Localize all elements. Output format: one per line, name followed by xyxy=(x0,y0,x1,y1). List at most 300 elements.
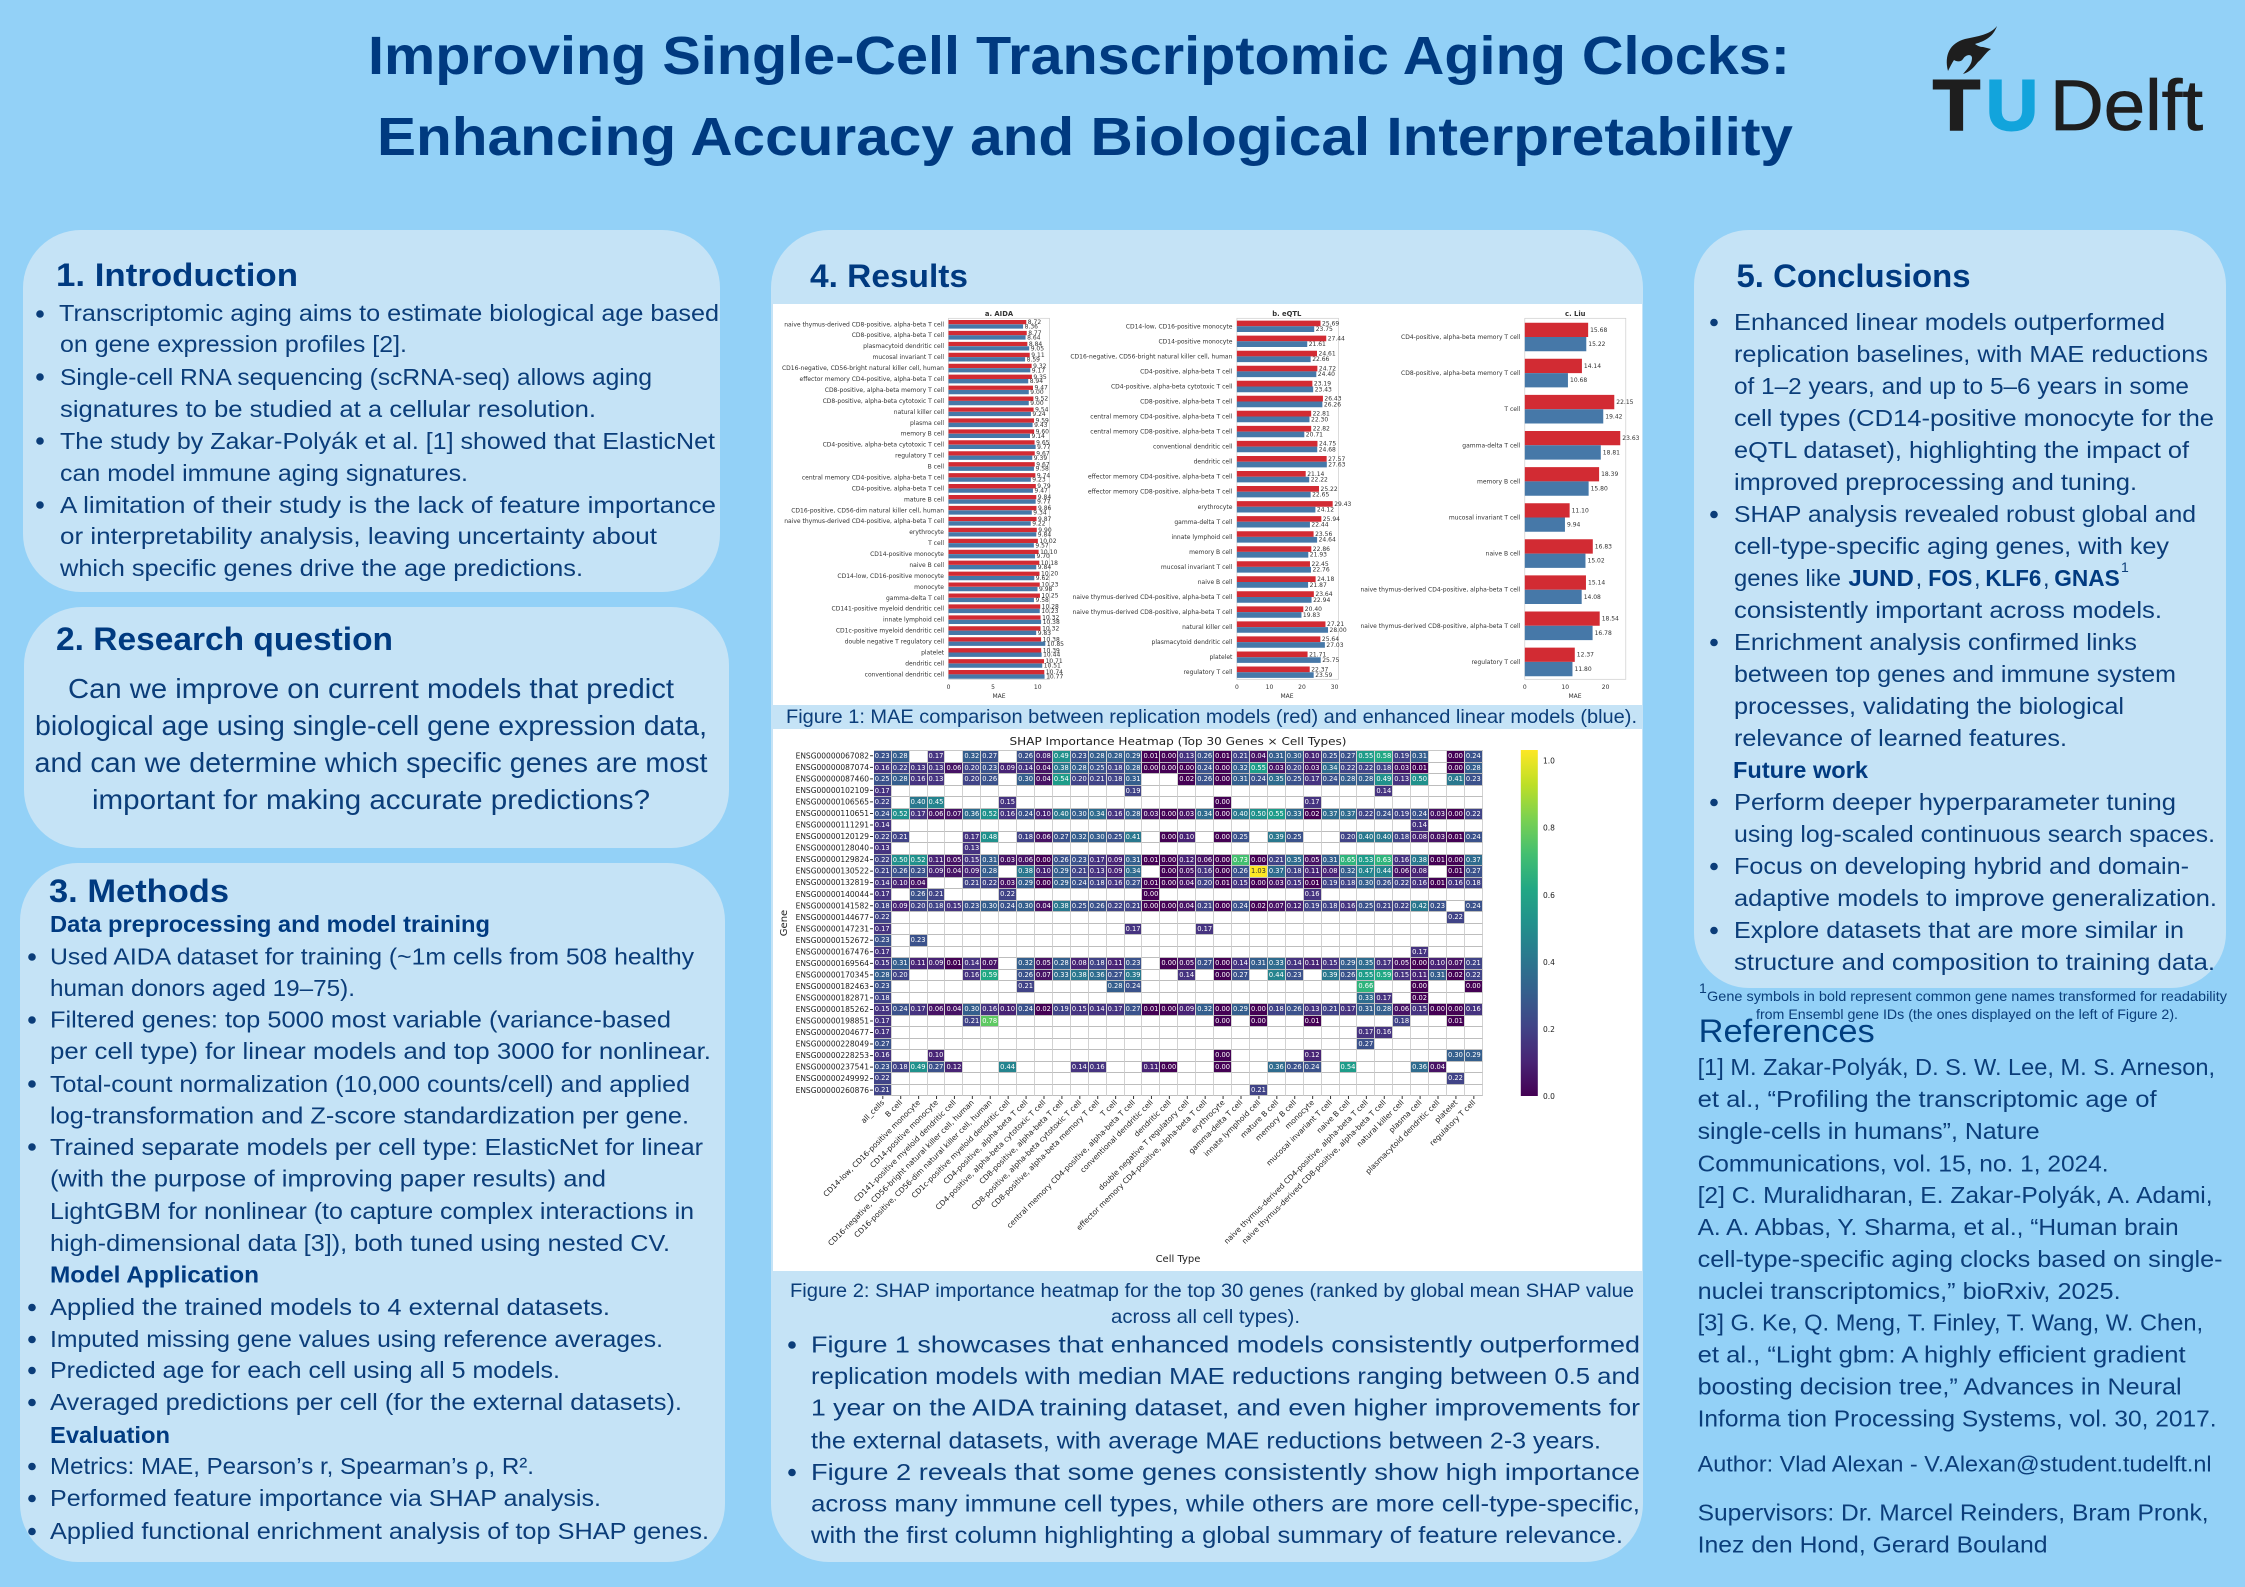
bar chart: c. Liu: 18.54 xyxy=(1602,616,1619,623)
bar chart: a. AIDA: 9.23 xyxy=(1032,477,1046,484)
chart: SHAP importance heatmap cells: 0.21 xyxy=(1126,902,1140,910)
chart: SHAP importance heatmap cells: 0.24 xyxy=(1000,902,1015,910)
bar chart: c. Liu: 22.15 xyxy=(1616,399,1634,406)
chart: SHAP importance heatmap cells: 0.32 xyxy=(964,752,979,760)
chart: SHAP importance heatmap cells: 0.17 xyxy=(911,1005,926,1013)
bar chart: a. AIDA: 8.84 xyxy=(1029,341,1042,348)
chart: SHAP importance heatmap cells: 0.22 xyxy=(1394,902,1409,910)
chart: SHAP importance heatmap cells: 0.22 xyxy=(1466,970,1481,978)
chart: SHAP importance heatmap cells: 0.04 xyxy=(1430,1062,1445,1070)
chart: SHAP importance heatmap cells: 0.03 xyxy=(1000,856,1015,864)
bar chart: a. AIDA: 9.57 xyxy=(1035,542,1049,549)
chart: SHAP importance heatmap cells: 0.16 xyxy=(1305,890,1320,898)
chart: SHAP importance heatmap cells: 0.12 xyxy=(1287,902,1302,910)
chart: SHAP importance heatmap cells: 0.38 xyxy=(1412,856,1427,864)
chart: figure 2 heatmap frame: ENSG00000067082 xyxy=(796,751,869,760)
bar chart: c. Liu: memory B cell xyxy=(1477,478,1521,485)
chart: SHAP importance heatmap cells: 0.31 xyxy=(1358,1005,1373,1013)
chart: SHAP importance heatmap cells: 0.22 xyxy=(1448,1074,1463,1082)
text block: conclusions bullets: KLF6 xyxy=(1985,565,2041,591)
text block: conclusions bullets: JUND xyxy=(1848,565,1914,591)
chart: figure 2 heatmap frame: central memory CD4-positive, alpha-beta T cell xyxy=(1005,1098,1137,1230)
chart: SHAP importance heatmap cells: 0.45 xyxy=(929,798,943,806)
chart: SHAP importance heatmap cells: 0.25 xyxy=(1090,764,1105,772)
bar chart: a. AIDA: 9.43 xyxy=(1034,422,1048,429)
chart: SHAP importance heatmap cells: 0.15 xyxy=(1394,970,1409,978)
bar chart: c. Liu: 10 xyxy=(1561,684,1569,691)
chart: SHAP importance heatmap cells: 0.00 xyxy=(1215,775,1230,783)
chart: SHAP importance heatmap cells: 0.01 xyxy=(1430,878,1445,886)
bar chart: b. eQTL: effector memory CD4-positive, alpha-beta T cell xyxy=(1088,474,1233,481)
text block: future work xyxy=(1710,757,2217,975)
bar chart: a. AIDA: 10.77 xyxy=(1046,674,1063,681)
chart: SHAP importance heatmap cells: 0.23 xyxy=(875,936,890,944)
chart: SHAP importance heatmap cells: 0.27 xyxy=(1126,878,1140,886)
bar chart: a. AIDA: CD8-positive, alpha-beta T cell xyxy=(852,332,944,339)
chart: SHAP importance heatmap cells: 0.27 xyxy=(982,752,997,760)
chart: SHAP importance heatmap cells: 0.28 xyxy=(893,775,908,783)
chart: SHAP importance heatmap cells: 0.09 xyxy=(1108,867,1123,875)
chart: SHAP importance heatmap cells: 0.40 xyxy=(1358,832,1373,840)
bar chart: a. AIDA: 9.22 xyxy=(1032,520,1046,527)
text block: data preprocessing: LightGBM for nonlinear (to capture complex interactions in xyxy=(50,1198,694,1224)
chart: SHAP importance heatmap cells: 0.09 xyxy=(1000,764,1015,772)
bar chart: b. eQTL: CD8-positive, alpha-beta T cell xyxy=(1140,398,1233,406)
text block: research question xyxy=(34,673,708,815)
chart: SHAP importance heatmap cells: 0.17 xyxy=(1412,948,1427,956)
chart: SHAP importance heatmap cells: 0.22 xyxy=(1394,878,1409,886)
chart: SHAP importance heatmap cells: 0.17 xyxy=(1126,924,1140,932)
bar chart: b. eQTL: 22.30 xyxy=(1311,416,1328,423)
chart: SHAP importance heatmap cells: 0.24 xyxy=(1018,1005,1033,1013)
chart: SHAP importance heatmap cells: 0.38 xyxy=(1054,902,1069,910)
chart: SHAP importance heatmap cells: 0.25 xyxy=(1072,902,1087,910)
chart: figure 2 heatmap frame: T cell xyxy=(1098,1098,1119,1119)
bar chart: b. eQTL: 10 xyxy=(1266,684,1273,691)
chart: figure 2 heatmap frame: ENSG00000167476 xyxy=(796,947,869,956)
chart: SHAP importance heatmap cells: 0.28 xyxy=(1340,775,1355,783)
references: [2] C. Muralidharan, E. Zakar-Polyák, A. Adami, xyxy=(1698,1182,2213,1208)
chart: SHAP importance heatmap cells: 0.38 xyxy=(1018,867,1033,875)
chart: SHAP importance heatmap cells: 0.21 xyxy=(875,867,890,875)
chart: SHAP importance heatmap cells: 0.24 xyxy=(875,810,890,818)
chart: SHAP importance heatmap cells: 0.00 xyxy=(1161,764,1176,772)
chart: SHAP importance heatmap cells: 0.31 xyxy=(1269,752,1284,760)
chart: SHAP importance heatmap cells: 0.31 xyxy=(1126,775,1140,783)
chart: figure 2 heatmap frame: mucosal invariant T cell xyxy=(1264,1098,1334,1168)
bar chart: a. AIDA: 10.74 xyxy=(1046,669,1063,676)
chart: SHAP importance heatmap cells: 0.05 xyxy=(1036,959,1051,967)
chart: SHAP importance heatmap cells: 0.17 xyxy=(1376,994,1391,1002)
text block: introduction bullets: can model immune aging signatures. xyxy=(60,460,468,486)
bar chart: a. AIDA: B cell xyxy=(928,464,944,470)
references: et al., “Profiling the transcriptomic age of xyxy=(1698,1086,2157,1112)
chart: figure 2 heatmap frame: gamma-delta T cell xyxy=(1187,1098,1244,1156)
chart: SHAP importance heatmap cells: 0.17 xyxy=(875,948,890,956)
bar chart: b. eQTL: naive thymus-derived CD4-positive, alpha-beta T cell xyxy=(1073,594,1233,601)
chart: SHAP importance heatmap cells: 0.11 xyxy=(911,959,926,967)
chart: SHAP importance heatmap cells: 0.00 xyxy=(1161,832,1176,840)
chart: SHAP importance heatmap cells: 0.19 xyxy=(1394,752,1409,760)
chart: SHAP importance heatmap cells: 0.13 xyxy=(1179,752,1194,760)
bar chart: b. eQTL: MAE xyxy=(1280,693,1294,700)
chart: SHAP importance heatmap cells: 0.22 xyxy=(875,832,890,840)
chart: SHAP importance heatmap cells: 0.19 xyxy=(1394,810,1409,818)
bar chart: b. eQTL: 27.63 xyxy=(1328,462,1346,469)
chart: SHAP importance heatmap cells: 0.14 xyxy=(875,878,890,886)
chart: SHAP importance heatmap cells: 0.25 xyxy=(1108,832,1123,840)
text block: data preprocessing: Total-count normalization (10,000 counts/cell) and applied xyxy=(50,1071,690,1097)
chart: SHAP importance heatmap cells: 0.53 xyxy=(1358,856,1373,864)
bar chart: b. eQTL: 28.00 xyxy=(1330,627,1347,634)
chart: SHAP importance heatmap cells: 0.23 xyxy=(875,982,890,990)
bar chart: c. Liu: 14.08 xyxy=(1584,594,1601,601)
chart: SHAP importance heatmap cells: 0.31 xyxy=(1412,752,1427,760)
text block: evaluation xyxy=(28,1422,709,1544)
bar chart: a. AIDA: mucosal invariant T cell xyxy=(873,354,944,361)
bar chart: b. eQTL: central memory CD4-positive, alpha-beta T cell xyxy=(1090,414,1233,420)
bar chart: c. Liu: regulatory T cell xyxy=(1471,659,1521,666)
bar chart: b. eQTL: 23.19 xyxy=(1314,381,1331,388)
chart: SHAP importance heatmap cells: 0.00 xyxy=(1161,902,1176,910)
chart: figure 2 heatmap frame: naive thymus-derived CD8-positive, alpha-beta T cell xyxy=(1240,1098,1388,1246)
chart: SHAP importance heatmap cells: 0.30 xyxy=(1018,902,1033,910)
title xyxy=(368,26,1793,167)
bar chart: c. Liu: 9.94 xyxy=(1567,522,1581,529)
bar chart: c. Liu: MAE xyxy=(1568,693,1582,700)
chart: SHAP importance heatmap cells: 0.00 xyxy=(1143,902,1158,910)
chart: SHAP importance heatmap cells: 0.26 xyxy=(1340,970,1355,978)
text block: evaluation: Metrics: MAE, Pearson’s r, Spearman’s ρ, R². xyxy=(50,1453,534,1479)
chart: SHAP importance heatmap cells: 0.06 xyxy=(929,810,943,818)
chart: SHAP importance heatmap cells: 0.22 xyxy=(875,1074,890,1082)
heading: conclusions: 5. Conclusions xyxy=(1736,258,1970,294)
chart: SHAP importance heatmap cells: 0.11 xyxy=(1143,1062,1158,1070)
chart: SHAP importance heatmap cells: 0.24 xyxy=(1197,764,1212,772)
chart: SHAP importance heatmap cells: 0.20 xyxy=(1197,878,1212,886)
chart: SHAP importance heatmap cells: 0.18 xyxy=(1269,1005,1284,1013)
chart: SHAP importance heatmap cells: 0.01 xyxy=(1448,867,1463,875)
chart: SHAP importance heatmap cells: 0.36 xyxy=(1412,1062,1427,1070)
chart: figure 2 heatmap frame: conventional dendritic cell xyxy=(1078,1098,1155,1175)
chart: SHAP importance heatmap cells: 0.41 xyxy=(1126,832,1140,840)
legend: colour bar: 0.6 xyxy=(1543,891,1555,900)
bar chart: b. eQTL: 20 xyxy=(1298,684,1306,691)
text block: conclusions bullets: SHAP analysis revealed robust global and xyxy=(1734,501,2196,527)
caption: figure 2: across all cell types). xyxy=(1111,1306,1300,1328)
chart: figure 2 heatmap frame: naive thymus-derived CD4-positive, alpha-beta T cell xyxy=(1222,1098,1370,1246)
text block: conclusions bullets: 1 xyxy=(2121,559,2129,575)
bar chart: b. eQTL: 26.26 xyxy=(1324,401,1341,408)
chart: SHAP importance heatmap cells: 0.04 xyxy=(1036,775,1051,783)
chart: SHAP importance heatmap cells: 0.23 xyxy=(1072,856,1087,864)
chart: SHAP importance heatmap cells: 0.32 xyxy=(1233,764,1248,772)
bar chart: b. eQTL: 24.40 xyxy=(1318,371,1335,378)
chart: figure 2 heatmap frame: ENSG00000170345 xyxy=(796,970,869,980)
chart: SHAP importance heatmap cells: 0.24 xyxy=(1466,902,1481,910)
chart: SHAP importance heatmap cells: 0.06 xyxy=(929,1005,943,1013)
bar chart: c. Liu: 11.80 xyxy=(1574,666,1592,673)
bar chart: a. AIDA: CD141-positive myeloid dendritic cell xyxy=(832,606,944,613)
text block: conclusions bullets: genes like xyxy=(1734,565,1841,591)
text block: conclusions bullets: consistently important across models. xyxy=(1734,597,2162,623)
bar chart: a. AIDA: 9.77 xyxy=(1037,498,1051,505)
bar chart: c. Liu: 15.80 xyxy=(1591,486,1608,493)
chart: SHAP importance heatmap cells: 0.37 xyxy=(1466,856,1481,864)
chart: SHAP importance heatmap cells: 0.13 xyxy=(929,764,943,772)
chart: SHAP importance heatmap cells: 0.00 xyxy=(1412,982,1427,990)
chart: figure 2 heatmap frame: ENSG00000128040 xyxy=(796,844,869,853)
bar chart: c. Liu: 16.83 xyxy=(1595,543,1612,550)
bar chart: a. AIDA: 9.14 xyxy=(1032,433,1045,440)
chart: SHAP importance heatmap cells: 0.30 xyxy=(1358,878,1373,886)
chart: SHAP importance heatmap cells: 0.16 xyxy=(1376,1028,1391,1036)
chart: SHAP importance heatmap cells: 0.01 xyxy=(1143,856,1158,864)
chart: SHAP importance heatmap cells: 0.22 xyxy=(1466,810,1481,818)
chart: SHAP importance heatmap cells: 0.12 xyxy=(1305,1051,1320,1059)
chart: SHAP importance heatmap cells: 0.33 xyxy=(1287,810,1302,818)
bar chart: c. Liu: 15.14 xyxy=(1588,580,1605,587)
chart: SHAP importance heatmap cells: 0.54 xyxy=(1054,775,1069,783)
chart: SHAP importance heatmap cells: 0.11 xyxy=(1108,959,1123,967)
bar chart: a. AIDA: erythrocyte xyxy=(909,529,944,536)
author: Author: Vlad Alexan - V.Alexan@student.tudelft.nl xyxy=(1698,1452,2212,1476)
bar chart: b. eQTL: 24.75 xyxy=(1319,441,1336,448)
title: Improving Single-Cell Transcriptomic Aging Clocks: xyxy=(368,26,1790,86)
chart: figure 2 heatmap frame: ENSG00000140044 xyxy=(796,890,869,899)
chart: SHAP importance heatmap cells: 0.27 xyxy=(1108,970,1123,978)
text block: data preprocessing: Data preprocessing and model training xyxy=(50,911,490,937)
chart: SHAP importance heatmap cells: 0.06 xyxy=(946,764,961,772)
chart: SHAP importance heatmap cells: 0.16 xyxy=(1412,878,1427,886)
chart: SHAP importance heatmap cells: 0.23 xyxy=(1287,970,1302,978)
chart: SHAP importance heatmap cells: 0.06 xyxy=(1394,1005,1409,1013)
bar chart: b. eQTL: 23.43 xyxy=(1315,386,1332,393)
text block: future work: using log-scaled continuous search spaces. xyxy=(1734,821,2215,847)
chart: SHAP importance heatmap cells: 0.21 xyxy=(1018,982,1033,990)
chart: SHAP importance heatmap cells: 0.10 xyxy=(893,878,908,886)
bar chart: b. eQTL: 22.45 xyxy=(1312,561,1329,568)
chart: SHAP importance heatmap cells: 0.00 xyxy=(1215,1051,1230,1059)
bar chart: a. AIDA: 9.74 xyxy=(1037,472,1050,479)
bar chart: a. AIDA: 10.38 xyxy=(1043,636,1060,643)
chart: SHAP importance heatmap cells: 0.30 xyxy=(1287,752,1302,760)
logo: TU Delft: T xyxy=(1933,67,1980,146)
bar chart: b. eQTL: 24.72 xyxy=(1319,366,1336,373)
chart: SHAP importance heatmap cells: 0.00 xyxy=(1215,1005,1230,1013)
chart: SHAP importance heatmap cells: 0.11 xyxy=(1412,970,1427,978)
text block: conclusions bullets: GNAS xyxy=(2054,565,2120,591)
bar chart: b. eQTL: 22.81 xyxy=(1313,411,1330,418)
references: cell-type-specific aging clocks based on single- xyxy=(1698,1246,2223,1272)
chart: SHAP importance heatmap cells: 0.14 xyxy=(1233,959,1248,967)
text block: conclusions bullets: eQTL dataset), highlighting the impact of xyxy=(1734,437,2190,463)
bar chart: a. AIDA: double negative T regulatory cell xyxy=(845,639,944,646)
bar chart: a. AIDA: effector memory CD4-positive, alpha-beta T cell xyxy=(800,376,944,383)
chart: SHAP importance heatmap cells: 0.16 xyxy=(1108,810,1123,818)
chart: SHAP importance heatmap cells: 0.00 xyxy=(1161,752,1176,760)
bar chart: a. AIDA: 10.18 xyxy=(1041,560,1058,567)
chart: SHAP importance heatmap cells: 0.14 xyxy=(1072,1062,1087,1070)
text block: introduction bullets: signatures to be studied at a cellular resolution. xyxy=(60,396,596,422)
chart: SHAP importance heatmap cells: 0.20 xyxy=(893,970,908,978)
chart: SHAP importance heatmap cells: 0.31 xyxy=(1430,970,1445,978)
bar chart: b. eQTL: 21.87 xyxy=(1310,582,1327,589)
logo: TU Delft xyxy=(1933,26,2203,146)
chart: SHAP importance heatmap cells: 0.35 xyxy=(1358,959,1373,967)
chart: SHAP importance heatmap cells: 0.27 xyxy=(1197,959,1212,967)
chart: figure 2 heatmap frame: ENSG00000182871 xyxy=(796,994,869,1002)
chart: SHAP importance heatmap cells: 0.22 xyxy=(875,856,890,864)
chart: SHAP importance heatmap cells: 0.26 xyxy=(1090,902,1105,910)
chart: SHAP importance heatmap cells: 0.10 xyxy=(1305,752,1320,760)
references: boosting decision tree,” Advances in Neural xyxy=(1698,1374,2182,1400)
chart: SHAP importance heatmap cells: 0.40 xyxy=(911,798,926,806)
bar chart: b. eQTL: 25.94 xyxy=(1323,516,1340,523)
bar chart: b. eQTL: natural killer cell xyxy=(1182,624,1233,631)
bar chart: c. Liu: 10.68 xyxy=(1570,377,1587,384)
bar chart: a. AIDA: 10.23 xyxy=(1041,582,1059,589)
chart: figure 2 heatmap frame: ENSG00000237541 xyxy=(796,1063,869,1072)
bar chart: c. Liu: 18.81 xyxy=(1603,449,1620,456)
bar chart: b. eQTL: CD4-positive, alpha-beta T cell xyxy=(1140,368,1233,375)
chart: SHAP importance heatmap cells: 0.06 xyxy=(1197,856,1212,864)
chart: SHAP importance heatmap cells: 0.22 xyxy=(875,798,890,806)
bar chart: a. AIDA: CD14-positive monocyte xyxy=(870,551,944,558)
bar chart: a. AIDA: 10.02 xyxy=(1039,538,1057,545)
chart: SHAP importance heatmap cells: 0.18 xyxy=(893,1062,908,1070)
bar chart: a. AIDA: conventional dendritic cell xyxy=(865,671,944,678)
chart: SHAP importance heatmap cells: 0.10 xyxy=(929,1051,943,1059)
bar chart: a. AIDA: 9.84 xyxy=(1038,531,1051,538)
bar chart: a. AIDA: 9.84 xyxy=(1038,494,1051,501)
bar chart: b. eQTL: 21.14 xyxy=(1307,471,1325,478)
chart: SHAP importance heatmap cells: 0.04 xyxy=(911,878,926,886)
chart: SHAP importance heatmap cells: 0.28 xyxy=(875,970,890,978)
chart: SHAP importance heatmap cells: 0.16 xyxy=(1000,810,1015,818)
chart: SHAP importance heatmap cells: 0.18 xyxy=(1466,878,1481,886)
heading: research question: 2. Research question xyxy=(56,621,393,657)
bar chart: a. AIDA: CD8-positive, alpha-beta cytotoxic T cell xyxy=(823,398,944,405)
chart: SHAP importance heatmap cells: 0.10 xyxy=(1430,959,1445,967)
chart: SHAP importance heatmap cells: 0.07 xyxy=(1036,970,1051,978)
chart: SHAP importance heatmap cells: 0.00 xyxy=(1448,1005,1463,1013)
chart: SHAP importance heatmap cells: 0.16 xyxy=(1108,878,1123,886)
chart: SHAP importance heatmap cells: 0.28 xyxy=(1358,775,1373,783)
bar chart: b. eQTL: 23.75 xyxy=(1316,326,1333,333)
text block: future work: Perform deeper hyperparameter tuning xyxy=(1734,789,2176,815)
legend: colour bar: 0.4 xyxy=(1543,958,1555,967)
chart: SHAP importance heatmap cells: 0.19 xyxy=(1054,1005,1069,1013)
bar chart: b. eQTL: innate lymphoid cell xyxy=(1171,534,1233,541)
chart: SHAP importance heatmap cells: 0.26 xyxy=(1287,1005,1302,1013)
text block: results discussion: the external datasets, with average MAE reductions between 2-3 years. xyxy=(811,1428,1601,1454)
bar chart: b. eQTL: CD14-low, CD16-positive monocyte xyxy=(1126,323,1233,330)
bar chart: b. eQTL: 22.37 xyxy=(1311,666,1329,673)
chart: SHAP importance heatmap cells: 0.28 xyxy=(1072,764,1087,772)
chart: SHAP importance heatmap cells: 0.22 xyxy=(1448,913,1463,921)
bar chart: a. AIDA: 8.94 xyxy=(1030,378,1043,385)
bar chart: c. Liu: 0 xyxy=(1523,684,1527,691)
chart: SHAP importance heatmap cells: 0.03 xyxy=(1430,810,1445,818)
text block: conclusions bullets: Enrichment analysis confirmed links xyxy=(1734,629,2137,655)
chart: SHAP importance heatmap cells: 0.24 xyxy=(1466,832,1481,840)
chart: SHAP importance heatmap cells: 0.02 xyxy=(1305,810,1320,818)
bar chart: a. AIDA: mature B cell xyxy=(904,496,944,503)
chart: SHAP importance heatmap cells: 0.31 xyxy=(893,959,908,967)
chart: figure 2 heatmap frame: innate lymphoid cell xyxy=(1202,1098,1262,1158)
chart: SHAP importance heatmap cells: 0.31 xyxy=(1323,856,1337,864)
chart: SHAP importance heatmap cells: 0.17 xyxy=(1358,1028,1373,1036)
chart: SHAP importance heatmap cells: 0.11 xyxy=(1305,867,1320,875)
text block: model application xyxy=(28,1261,682,1415)
chart: SHAP importance heatmap cells: 0.06 xyxy=(1018,856,1033,864)
chart: figure 2 heatmap frame: platelet xyxy=(1433,1098,1459,1125)
chart: SHAP importance heatmap cells: 0.21 xyxy=(1233,752,1248,760)
chart: figure 2 heatmap frame: Gene xyxy=(779,910,790,936)
bar chart: b. eQTL: platelet xyxy=(1209,654,1233,661)
chart: SHAP importance heatmap cells: 0.24 xyxy=(1233,902,1248,910)
bar chart: a. AIDA: central memory CD4-positive, alpha-beta T cell xyxy=(802,474,944,482)
bar chart: b. eQTL: 0 xyxy=(1235,684,1239,691)
chart: SHAP importance heatmap cells: 0.01 xyxy=(1143,878,1158,886)
chart: SHAP importance heatmap cells: 0.00 xyxy=(1215,764,1230,772)
chart: SHAP importance heatmap cells: 0.32 xyxy=(1197,1005,1212,1013)
chart: SHAP importance heatmap cells: 0.24 xyxy=(893,1005,908,1013)
chart: SHAP importance heatmap cells: 0.11 xyxy=(1305,959,1320,967)
chart: SHAP importance heatmap cells: 0.01 xyxy=(1412,764,1427,772)
bar chart: b. eQTL: 23.64 xyxy=(1315,591,1333,598)
chart: SHAP importance heatmap cells: 0.24 xyxy=(1466,752,1481,760)
bar chart: a. AIDA: 10.10 xyxy=(1040,549,1057,556)
chart: SHAP importance heatmap cells: 0.17 xyxy=(875,924,890,932)
text block: conclusions bullets: processes, validating the biological xyxy=(1734,693,2124,719)
references: single-cells in humans”, Nature xyxy=(1698,1118,2040,1144)
chart: SHAP importance heatmap cells: 0.03 xyxy=(1430,832,1445,840)
text block: results discussion: Figure 2 reveals that some genes consistently show high importance xyxy=(811,1459,1640,1485)
chart: SHAP importance heatmap cells: 0.03 xyxy=(1179,810,1194,818)
chart: SHAP importance heatmap cells: 0.17 xyxy=(929,752,943,760)
chart: SHAP importance heatmap cells: 0.52 xyxy=(982,810,997,818)
chart: SHAP importance heatmap cells: 0.00 xyxy=(1215,970,1230,978)
chart: SHAP importance heatmap cells: 0.36 xyxy=(964,810,979,818)
chart: SHAP importance heatmap cells: 0.21 xyxy=(964,878,979,886)
chart: SHAP importance heatmap cells: 0.66 xyxy=(1358,982,1373,990)
chart: SHAP importance heatmap cells: 0.18 xyxy=(875,902,890,910)
chart: SHAP importance heatmap cells: 0.15 xyxy=(1323,959,1337,967)
bar chart: b. eQTL: 30 xyxy=(1331,684,1339,691)
bar chart: a. AIDA: 9.52 xyxy=(1035,396,1048,403)
chart: SHAP importance heatmap cells: 0.20 xyxy=(964,775,979,783)
chart: SHAP importance heatmap cells: 0.16 xyxy=(964,970,979,978)
chart: figure 2 heatmap frame: ENSG00000228253 xyxy=(796,1051,869,1060)
bar chart: a. AIDA: 9.05 xyxy=(1031,345,1044,352)
chart: SHAP importance heatmap cells: 0.23 xyxy=(875,1062,890,1070)
chart: SHAP importance heatmap cells: 0.00 xyxy=(1143,764,1158,772)
chart: SHAP importance heatmap cells: 0.29 xyxy=(1466,1051,1481,1059)
chart: SHAP importance heatmap cells: 0.24 xyxy=(1251,775,1266,783)
chart: SHAP importance heatmap cells: 0.26 xyxy=(1197,775,1212,783)
bar chart: a. AIDA: 9.90 xyxy=(1038,527,1052,534)
bar chart: a. AIDA: 10.44 xyxy=(1043,652,1060,659)
chart: SHAP importance heatmap cells: 0.32 xyxy=(1018,959,1033,967)
bar chart: a. AIDA: 9.67 xyxy=(1036,461,1050,468)
chart: SHAP importance heatmap cells: 0.17 xyxy=(1376,959,1391,967)
chart: SHAP importance heatmap cells: 0.07 xyxy=(1448,959,1463,967)
text block: evaluation: Performed feature importance via SHAP analysis. xyxy=(50,1485,601,1511)
bar chart: a. AIDA: 10.38 xyxy=(1043,619,1060,626)
chart: SHAP importance heatmap cells: 0.17 xyxy=(875,1016,890,1024)
